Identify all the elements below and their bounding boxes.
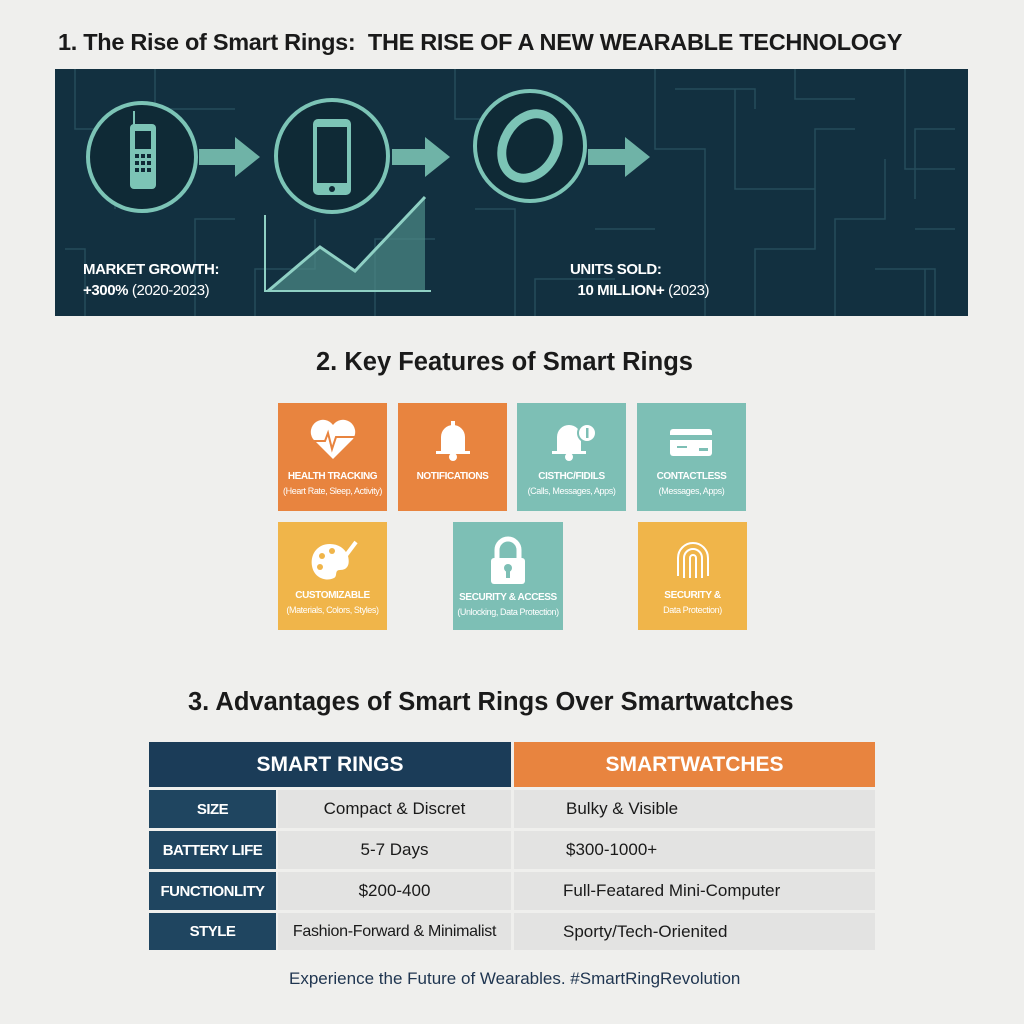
tile: customizable: (Materials, Colors, Styles) <box>286 605 379 615</box>
tile: security & access: (Unlocking, Data Protection) <box>457 607 559 617</box>
text: market growth: +300% (2020-2023) <box>83 282 209 299</box>
header: smartwatches: SMARTWATCHES <box>605 752 784 776</box>
tile: security & data: Data Protection) <box>663 605 722 615</box>
row: size: Compact & Discret <box>324 799 465 818</box>
row: style <box>149 913 875 950</box>
tile: calls/messages: (Calls, Messages, Apps) <box>528 486 615 496</box>
tile: customizable <box>278 522 387 630</box>
tile: customizable: CUSTOMIZABLE <box>295 590 370 601</box>
chart <box>265 197 431 291</box>
tile: health tracking: HEALTH TRACKING <box>288 471 377 482</box>
icon: ring <box>490 104 570 188</box>
row: battery: $300-1000+ <box>566 840 657 859</box>
row: battery: 5-7 Days <box>360 840 429 859</box>
header: smartwatches <box>514 742 875 787</box>
text: units sold: UNITS SOLD: <box>570 261 661 278</box>
arrows <box>199 137 650 177</box>
row: functionality: Full-Featared Mini-Computer <box>563 881 780 900</box>
row: battery: BATTERY LIFE <box>163 842 262 858</box>
row: size: SIZE <box>197 800 228 818</box>
tile: notifications: NOTIFICATIONS <box>417 471 488 482</box>
row: functionality: FUNCTIONLITY <box>160 882 264 900</box>
panel: banner <box>55 69 968 316</box>
tile: contactless <box>637 403 746 511</box>
tile: calls/messages <box>517 403 626 511</box>
heading: advantages: 3. Advantages of Smart Rings Over Smartwatches <box>188 688 794 716</box>
row: functionality: $200-400 <box>359 881 430 900</box>
icon: feature phone <box>130 111 351 195</box>
row: style: Sporty/Tech-Orienited <box>563 922 727 940</box>
title: 1. The Rise of Smart Rings: THE RISE OF A NEW WEARABLE TECHNOLOGY <box>58 29 902 55</box>
tile: health tracking: (Heart Rate, Sleep, Activity) <box>283 486 382 496</box>
table <box>149 742 875 950</box>
tile: security & access <box>453 522 563 630</box>
tile: security & access: SECURITY & ACCESS <box>459 592 557 603</box>
tile: security & data: SECURITY & <box>664 590 721 601</box>
row: size: Bulky & Visible <box>566 799 678 818</box>
header: smart rings: SMART RINGS <box>256 752 404 776</box>
text: units sold <box>570 261 709 299</box>
text: units sold: 10 MILLION+ (2023) <box>578 282 709 299</box>
row: style: STYLE <box>190 923 235 940</box>
text: market growth: MARKET GROWTH: <box>83 261 219 278</box>
tile: notifications <box>398 403 507 511</box>
row: functionality <box>149 872 875 910</box>
text: market growth <box>83 261 219 299</box>
row: battery <box>149 831 875 869</box>
tile: health tracking <box>278 403 387 511</box>
tile: calls/messages: CISTHC/FIDILS <box>538 471 605 482</box>
tile: security & data <box>638 522 747 630</box>
heading: key features: 2. Key Features of Smart Rings <box>316 348 693 376</box>
footer tagline: Experience the Future of Wearables. #SmartRingRevolution <box>289 969 740 988</box>
row: style: Fashion-Forward & Minimalist <box>293 922 496 940</box>
header: smart rings <box>149 742 511 787</box>
circles <box>88 91 585 212</box>
icon: smartphone <box>313 119 351 195</box>
row: size <box>149 790 875 828</box>
tile: contactless: (Messages, Apps) <box>659 486 724 496</box>
tile: contactless: CONTACTLESS <box>657 471 726 482</box>
